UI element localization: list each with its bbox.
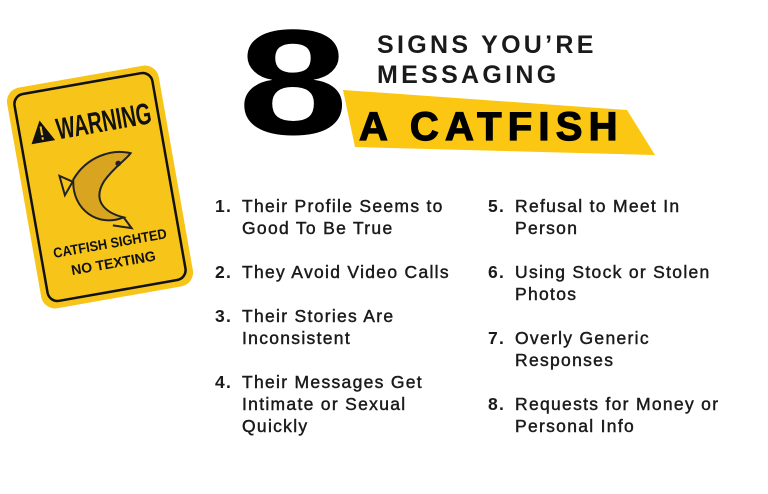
item 2 (215, 262, 450, 282)
big 8: 8 (238, 0, 348, 166)
list column 1: Intimate or Sexual (242, 394, 406, 414)
list column 1: Their Profile Seems to (242, 196, 444, 216)
text: catfish sighted: CATFISH SIGHTED (52, 225, 168, 261)
list column 1: Good To Be True (242, 218, 394, 238)
item 4 (215, 372, 423, 436)
list column 2: Photos (515, 284, 577, 304)
icon: warning triangle (28, 118, 55, 144)
item 7 (488, 328, 650, 370)
list column 1: 2. (215, 262, 232, 282)
title line 2: MESSAGING (377, 61, 560, 89)
list column 2: Refusal to Meet In (515, 196, 680, 216)
item 1 (215, 196, 444, 238)
sign: warning catfish (6, 66, 194, 308)
list column 1: Inconsistent (242, 328, 351, 348)
icon: fish (57, 149, 143, 239)
list column 2: Personal Info (515, 416, 635, 436)
list column 2: 6. (488, 262, 505, 282)
list column 2: Overly Generic (515, 328, 650, 348)
list column 1: Quickly (242, 416, 308, 436)
title line 1: SIGNS YOU’RE (377, 31, 597, 59)
list column 2 (488, 196, 719, 436)
list column 1: Their Messages Get (242, 372, 423, 392)
list column 1: 4. (215, 372, 232, 392)
item 3 (215, 306, 394, 348)
list column 1: They Avoid Video Calls (242, 262, 450, 282)
list column 2: 7. (488, 328, 505, 348)
list column 2: Requests for Money or (515, 394, 719, 414)
yellow banner (343, 90, 655, 155)
list column 2: Person (515, 218, 578, 238)
list column 2: 5. (488, 196, 505, 216)
item 5 (488, 196, 680, 238)
item 6 (488, 262, 711, 304)
title banner (238, 0, 655, 166)
list column 2: Using Stock or Stolen (515, 262, 711, 282)
list column 1: 1. (215, 196, 232, 216)
heading: WARNING: WARNING (54, 97, 154, 146)
sign: warning catfish: NO TEXTING (70, 248, 157, 278)
list column 1 (215, 196, 450, 436)
list column 1: 3. (215, 306, 232, 326)
item 8 (488, 394, 719, 436)
title line 3: A CATFISH (359, 105, 624, 149)
list column 1: Their Stories Are (242, 306, 394, 326)
list column 2: Responses (515, 350, 614, 370)
list column 2: 8. (488, 394, 505, 414)
